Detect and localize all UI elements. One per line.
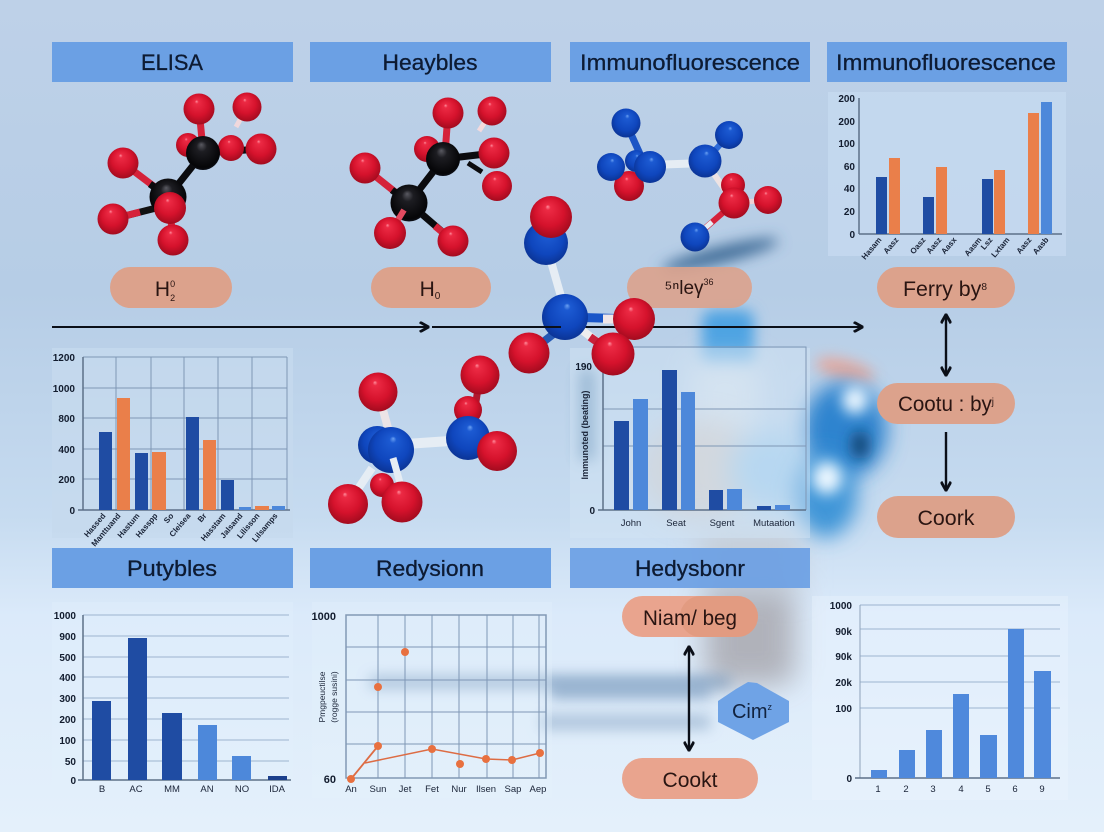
chart: lower left bar chart: 400 xyxy=(59,673,76,684)
molecule: black and red, left xyxy=(98,92,276,256)
heading: Redysionn: Redysionn xyxy=(376,556,484,581)
chart: lower middle line chart: Aep xyxy=(530,784,546,795)
chart: upper right bar chart: Aasz xyxy=(882,236,901,256)
chart: centre bar chart: Seat xyxy=(666,518,686,529)
chart: lower right bar chart: 1 xyxy=(875,784,881,795)
header row three xyxy=(52,548,810,588)
chart: lower right bar chart: 6 xyxy=(1012,784,1018,795)
chart: upper right bar chart: 60 xyxy=(844,162,855,173)
panel: upper right chart background xyxy=(828,92,1066,256)
chart: lower middle line chart: (rogge susini) xyxy=(329,671,339,723)
chart: lower left bar chart: 500 xyxy=(59,653,76,664)
chart: centre bar chart: Immunoted (beating) xyxy=(580,390,590,480)
chart: centre bar chart: John xyxy=(621,518,641,529)
arrow: down right xyxy=(945,432,947,490)
pill: Cookt: Cookt xyxy=(662,769,718,792)
chart: centre bar chart xyxy=(575,347,806,529)
chart: upper right bar chart: Aasz xyxy=(925,236,944,256)
chart: lower right bar chart: 3 xyxy=(930,784,936,795)
chart: upper right bar chart: Aasm xyxy=(963,236,984,258)
chart: left grouped bar chart: 200 xyxy=(58,475,75,486)
heading: Hedysbonr: Hedysbonr xyxy=(635,556,745,581)
chart: lower left bar chart: 100 xyxy=(59,736,76,747)
chart: lower right bar chart: 9 xyxy=(1039,784,1045,795)
arrow: long horizontal right xyxy=(432,326,862,328)
pill: Cootu by: Cootu : by xyxy=(898,393,994,416)
chart: lower left bar chart xyxy=(54,611,291,795)
pill: H2: 0 xyxy=(170,279,175,289)
chart: upper right bar chart: 0 xyxy=(849,230,855,241)
chart: lower middle line chart: 1000 xyxy=(312,611,336,623)
molecule: black and red, second xyxy=(350,96,512,256)
chart: lower right bar chart: 4 xyxy=(958,784,964,795)
chart: lower middle line chart: Jet xyxy=(399,784,412,795)
blurred laboratory background xyxy=(370,233,887,729)
panel: lower middle chart background xyxy=(312,602,552,798)
molecule: lower blue and red xyxy=(328,356,517,524)
arrow: long horizontal left xyxy=(52,326,428,328)
pill: Coork xyxy=(877,496,1015,538)
chart: left grouped bar chart: 1200 xyxy=(53,353,75,364)
chart: left grouped bar chart: Manttuand xyxy=(90,511,123,548)
chart: lower right bar chart: 90k xyxy=(835,627,852,638)
chart: left grouped bar chart: Hasspp xyxy=(134,511,160,539)
chart: left grouped bar chart: 400 xyxy=(58,445,75,456)
pill: H2: H xyxy=(155,278,170,301)
chart: left grouped bar chart: Hasstam xyxy=(199,512,228,543)
chart: lower middle line chart: An xyxy=(345,784,357,795)
arrow: central horizontal overlay xyxy=(432,326,561,328)
chart: lower right bar chart: 0 xyxy=(846,774,852,785)
header row one xyxy=(52,42,1067,82)
panel: lower right chart background xyxy=(812,596,1068,800)
chart: upper right bar chart: Aasb xyxy=(1031,235,1051,256)
chart: lower middle line chart: Fet xyxy=(425,784,439,795)
chart: lower left bar chart: B xyxy=(99,784,105,795)
chart: lower right bar chart: 100 xyxy=(835,704,852,715)
heading: Putybles: Putybles xyxy=(127,556,217,581)
heading: Immunofluorescence right xyxy=(827,42,1067,82)
arrow: double vertical right xyxy=(945,315,947,375)
chart: lower left bar chart: AN xyxy=(200,784,214,795)
chart: left grouped bar chart: 800 xyxy=(58,414,75,425)
icon: hexagon Cim: Cim xyxy=(732,701,768,723)
chart: lower middle line chart: 60 xyxy=(324,774,336,786)
pill: H0: H xyxy=(420,278,435,301)
chart: lower middle line chart xyxy=(312,611,546,795)
chart: lower left bar chart: 50 xyxy=(65,757,76,768)
pill: Cookt xyxy=(622,758,758,799)
pill: H0 xyxy=(371,267,491,308)
chart: lower left bar chart: 1000 xyxy=(54,611,76,622)
chart: centre bar chart: 0 xyxy=(589,506,595,517)
heading: Immunofluorescence right: Immunofluorescence xyxy=(836,50,1056,75)
heading: Heaybles xyxy=(310,42,551,82)
heading: Immunofluorescence xyxy=(570,42,810,82)
chart: lower middle line chart: Pmgpeuctilse xyxy=(317,671,327,723)
chart: lower middle line chart: Nur xyxy=(451,784,467,795)
pill: Ley: 36 xyxy=(704,277,714,287)
chart: lower left bar chart: 0 xyxy=(70,776,76,787)
chart: left grouped bar chart: Cleisea xyxy=(168,511,193,539)
chart: lower middle line chart: Sun xyxy=(370,784,386,795)
chart: left grouped bar chart: Jalsand xyxy=(218,511,245,540)
chart: lower left bar chart: 200 xyxy=(59,715,76,726)
pill: Ley xyxy=(627,267,752,308)
pill: Niam beg xyxy=(622,596,758,637)
molecule: blue and red, third xyxy=(597,108,782,252)
heading: ELISA xyxy=(52,42,293,82)
chart: centre bar chart: 190 xyxy=(575,362,592,373)
chart: lower left bar chart: IDA xyxy=(269,784,286,795)
chart: centre bar chart: Sgent xyxy=(710,518,735,529)
heading: Hedysbonr xyxy=(570,548,810,588)
chart: lower left bar chart: AC xyxy=(129,784,143,795)
pill: Niam beg: Niam/ beg xyxy=(643,607,737,630)
chart: left grouped bar chart: 1000 xyxy=(53,384,75,395)
chart: lower middle line chart: Sap xyxy=(505,784,521,795)
chart: left grouped bar chart: Br xyxy=(196,512,209,524)
icon: hexagon Cim xyxy=(718,682,789,740)
chart: left grouped bar chart xyxy=(53,353,290,548)
chart: upper right bar chart: Aasz xyxy=(1015,236,1034,256)
chart: left grouped bar chart: Lilsamps xyxy=(250,511,280,544)
pill: H2: 2 xyxy=(170,293,175,303)
chart: upper right bar chart: 40 xyxy=(844,184,855,195)
chart: upper right bar chart: 200 xyxy=(838,94,855,105)
panel: lower left chart background xyxy=(52,602,293,798)
chart: upper right bar chart: 20 xyxy=(844,207,855,218)
pill: Ley: ⁵ⁿleγ xyxy=(664,278,704,299)
pill: H0: 0 xyxy=(435,291,441,302)
chart: upper right bar chart: Oasz xyxy=(908,236,928,256)
pill: Ferry by: Ferry by xyxy=(903,278,980,301)
chart: left grouped bar chart: 0 xyxy=(69,506,75,517)
chart: left grouped bar chart: Hassed xyxy=(82,511,108,539)
chart: upper right bar chart: Hasam xyxy=(860,236,884,261)
chart: left grouped bar chart: Lilisson xyxy=(235,511,262,540)
heading: Heaybles: Heaybles xyxy=(382,50,478,75)
chart: upper right bar chart: Lsz xyxy=(979,236,995,252)
molecule: central blue and red xyxy=(508,196,655,376)
chart: lower left bar chart: MM xyxy=(164,784,180,795)
chart: left grouped bar chart: Hastum xyxy=(116,512,142,540)
chart: lower left bar chart: 900 xyxy=(59,632,76,643)
pill: Ferry by: 8 xyxy=(981,282,987,293)
chart: lower left bar chart: NO xyxy=(235,784,249,795)
chart: lower middle line chart: Ilsen xyxy=(476,784,496,795)
panel: centre chart background xyxy=(570,348,810,538)
pill: Ferry by xyxy=(877,267,1015,308)
chart: centre bar chart: Mutaation xyxy=(753,518,795,529)
chart: upper right bar chart: Lxtam xyxy=(989,236,1012,259)
heading: Putybles xyxy=(52,548,293,588)
pill: Cootu by: j xyxy=(991,397,994,408)
chart: upper right bar chart: 200 xyxy=(838,117,855,128)
panel: left chart background xyxy=(52,348,293,538)
pill: Coork: Coork xyxy=(918,507,975,530)
chart: upper right bar chart: Aasx xyxy=(939,235,959,256)
heading: Immunofluorescence: Immunofluorescence xyxy=(580,50,800,75)
heading: ELISA: ELISA xyxy=(141,50,203,75)
pill: H2 xyxy=(110,267,232,308)
arrow: double vertical lower xyxy=(688,647,690,750)
heading: Redysionn xyxy=(310,548,551,588)
chart: lower left bar chart: 300 xyxy=(59,694,76,705)
icon: hexagon Cim: z xyxy=(768,702,773,712)
pill: Cootu by xyxy=(877,383,1015,424)
chart: lower right bar chart: 20k xyxy=(835,678,852,689)
chart: upper right bar chart xyxy=(838,94,1062,261)
chart: upper right bar chart: 100 xyxy=(838,139,855,150)
chart: lower right bar chart: 5 xyxy=(985,784,991,795)
chart: left grouped bar chart: So xyxy=(162,511,176,525)
chart: lower right bar chart: 2 xyxy=(903,784,909,795)
chart: lower right bar chart: 1000 xyxy=(830,601,852,612)
chart: lower right bar chart: 90k xyxy=(835,652,852,663)
chart: lower right bar chart xyxy=(830,601,1060,795)
